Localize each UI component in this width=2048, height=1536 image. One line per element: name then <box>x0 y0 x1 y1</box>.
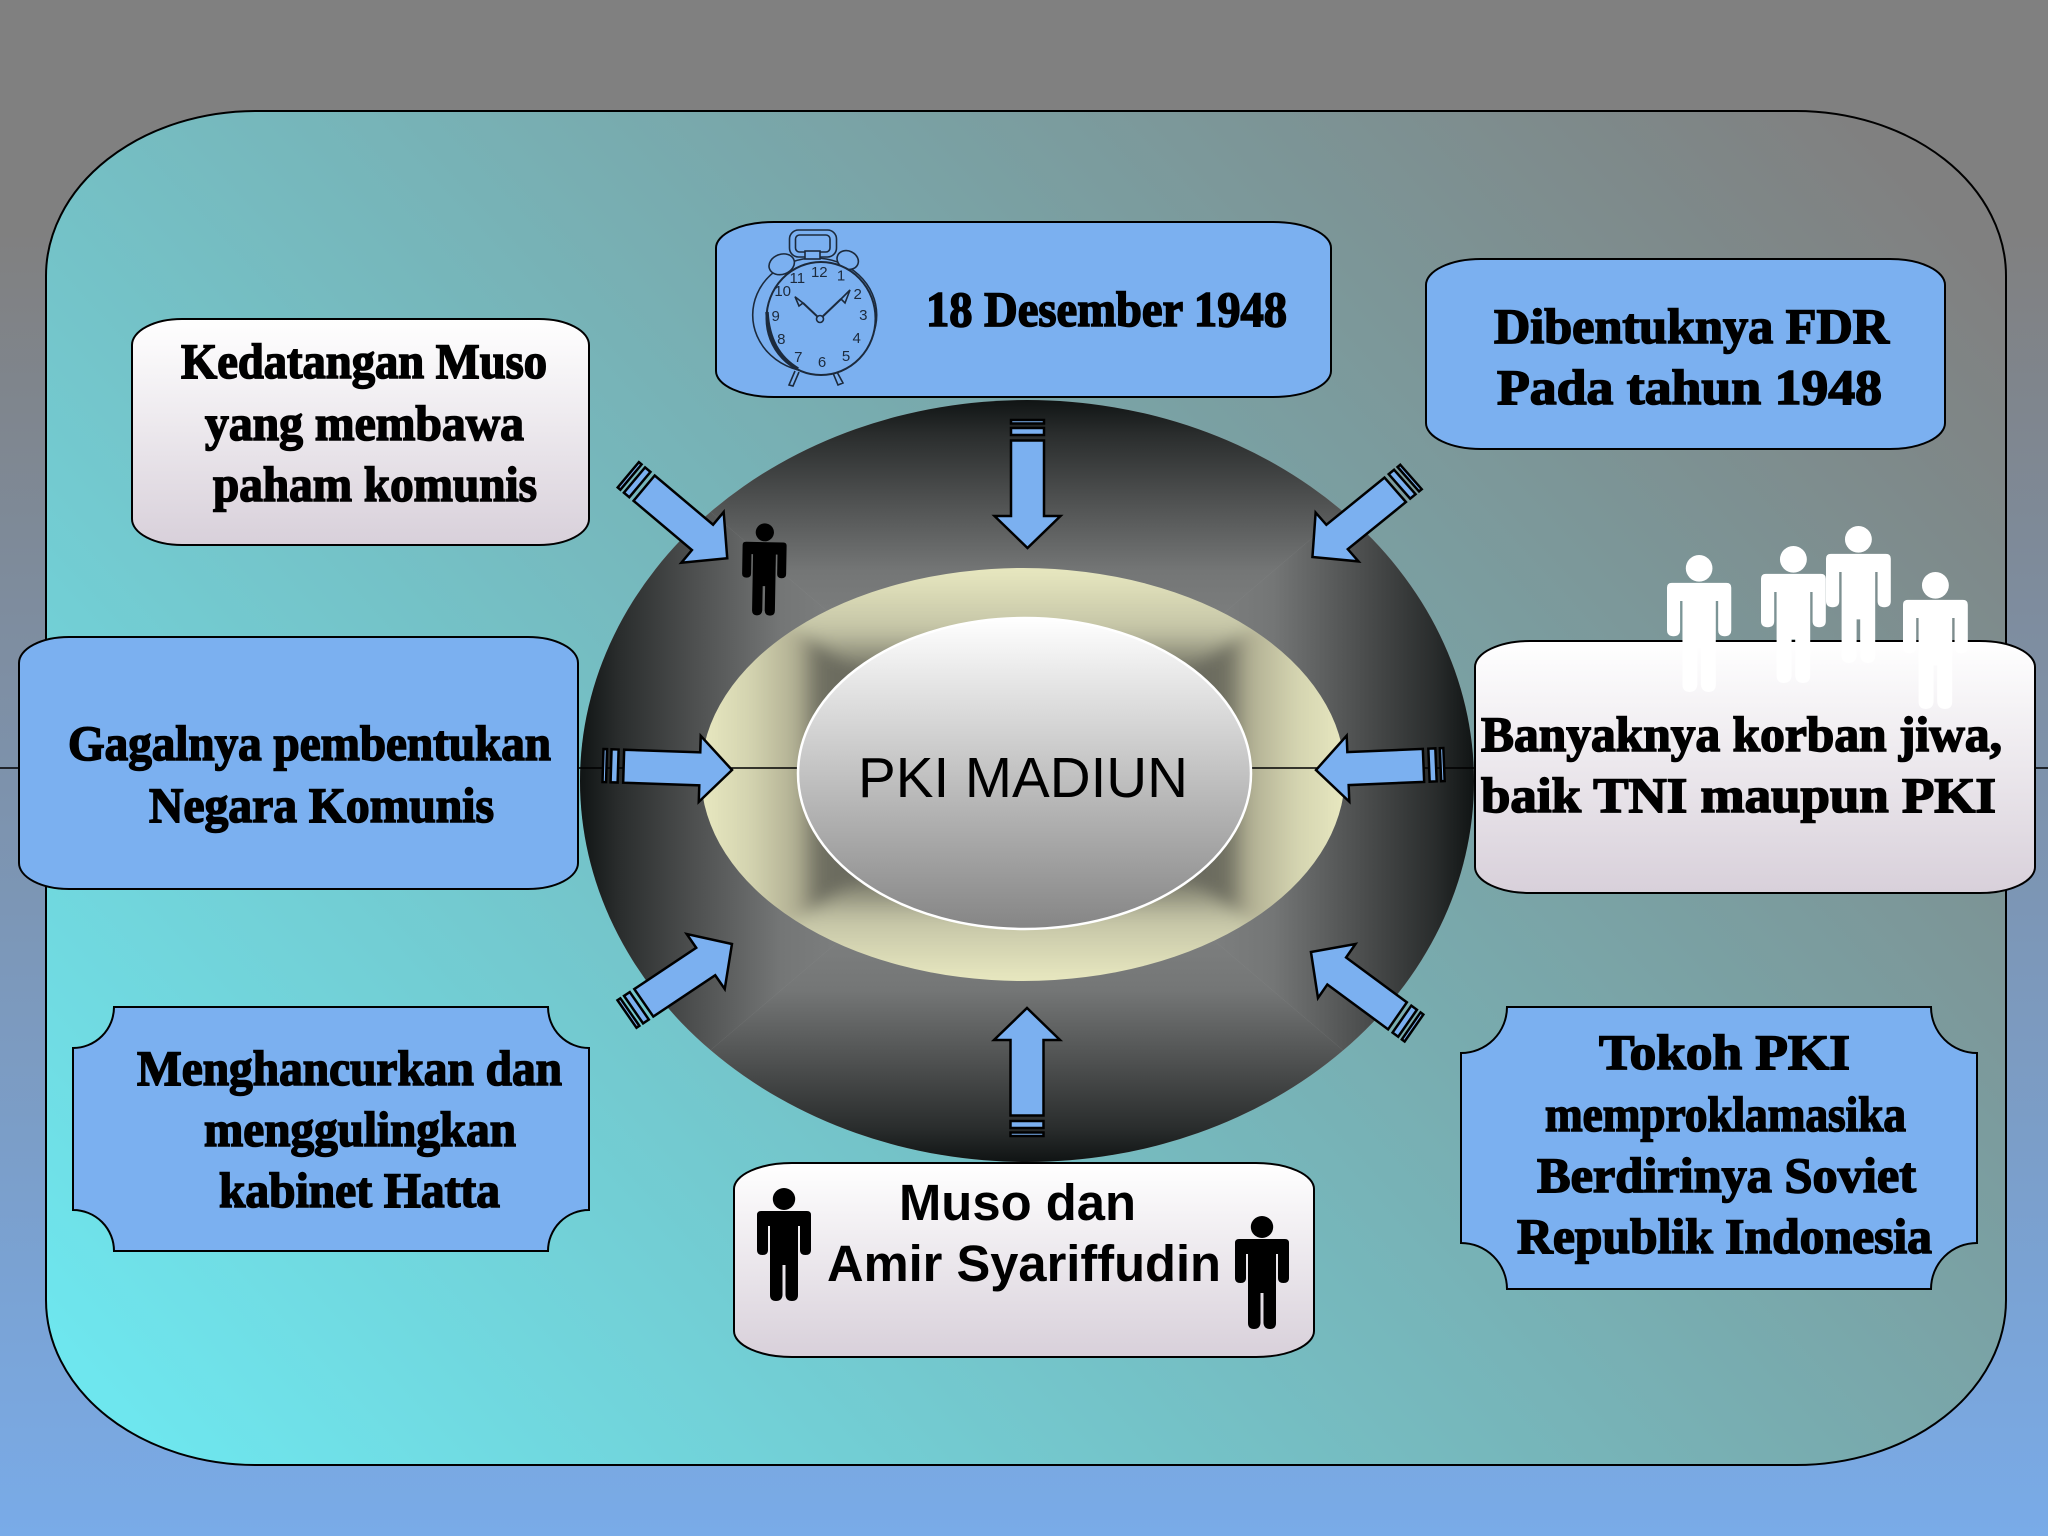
clock numerals: 4 <box>853 330 861 347</box>
clock numerals: 2 <box>854 286 862 303</box>
icon: four white people <box>1667 526 1968 709</box>
plaque text <box>137 1040 562 1218</box>
plaque text: Berdirinya Soviet <box>1537 1147 1916 1203</box>
centre label: PKI MADIUN <box>858 746 1188 810</box>
clock numerals: 1 <box>837 268 845 284</box>
clock numerals: 11 <box>790 270 805 287</box>
horizontal connector line <box>0 767 2048 769</box>
clock numerals: 7 <box>794 349 802 366</box>
box text: 18 Desember 1948 <box>926 281 1287 337</box>
plaque text: kabinet Hatta <box>219 1162 500 1218</box>
box text: Dibentuknya FDR <box>1494 298 1890 354</box>
box text <box>1494 298 1890 415</box>
box text: Pada tahun 1948 <box>1497 359 1882 415</box>
box text: Negara Komunis <box>149 777 494 833</box>
clock numerals <box>772 264 867 371</box>
icon: small black person <box>741 523 787 616</box>
arrow: top <box>994 420 1060 548</box>
arrow: bottom <box>994 1008 1060 1136</box>
box text <box>827 1174 1221 1292</box>
clock numerals: 3 <box>859 307 867 324</box>
clock numerals: 6 <box>818 354 826 371</box>
box text: Banyaknya korban jiwa, <box>1481 706 2002 762</box>
dark outer ellipse <box>579 400 1474 1162</box>
plaque text: memproklamasika <box>1545 1086 1906 1142</box>
plaque text <box>1517 1024 1932 1264</box>
icon: right person <box>1235 1216 1289 1329</box>
box: Banyaknya korban jiwa <box>1475 641 2035 893</box>
box text: baik TNI maupun PKI <box>1481 767 1996 823</box>
box: Gagalnya pembentukan <box>19 637 578 889</box>
box text: paham komunis <box>213 456 537 512</box>
arrow: left <box>602 732 733 803</box>
box text: yang membawa <box>205 395 524 451</box>
box text: Kedatangan Muso <box>181 333 547 389</box>
plaque text: menggulingkan <box>204 1101 516 1157</box>
box text <box>1481 706 2002 823</box>
clock numerals: 9 <box>772 308 780 325</box>
box: Muso dan Amir Syariffudin <box>734 1163 1314 1357</box>
box text: Amir Syariffudin <box>827 1235 1221 1292</box>
box text: Muso dan <box>899 1174 1136 1231</box>
plaque text: Republik Indonesia <box>1517 1208 1932 1264</box>
plaque: Menghancurkan dan menggulingkan <box>73 1007 589 1251</box>
arrow: bottom-right <box>1292 925 1433 1055</box>
clock numerals: 8 <box>777 331 785 348</box>
box: 18 Desember 1948 with clock <box>716 222 1331 397</box>
arrow: top-right <box>1291 453 1432 581</box>
centre ellipse: PKI MADIUN <box>798 618 1251 929</box>
arrow: right <box>1315 732 1445 803</box>
box text: Gagalnya pembentukan <box>68 715 551 771</box>
clock numerals: 12 <box>811 264 828 281</box>
box: Dibentuknya FDR <box>1426 259 1945 449</box>
plaque: Tokoh PKI <box>1461 1007 1977 1289</box>
clock numerals: 10 <box>774 283 791 300</box>
icon: alarm clock <box>753 230 877 386</box>
arrow: bottom-left <box>608 916 751 1041</box>
box text <box>181 333 547 512</box>
icon: left person <box>757 1188 811 1301</box>
arrow: top-left <box>607 449 748 584</box>
plaque text: Menghancurkan dan <box>137 1040 562 1096</box>
plaque text: Tokoh PKI <box>1599 1024 1850 1080</box>
box: Kedatangan Muso <box>132 319 589 545</box>
pale yellow middle ellipse <box>703 568 1343 981</box>
box text <box>68 715 551 833</box>
clock numerals: 5 <box>842 348 850 365</box>
